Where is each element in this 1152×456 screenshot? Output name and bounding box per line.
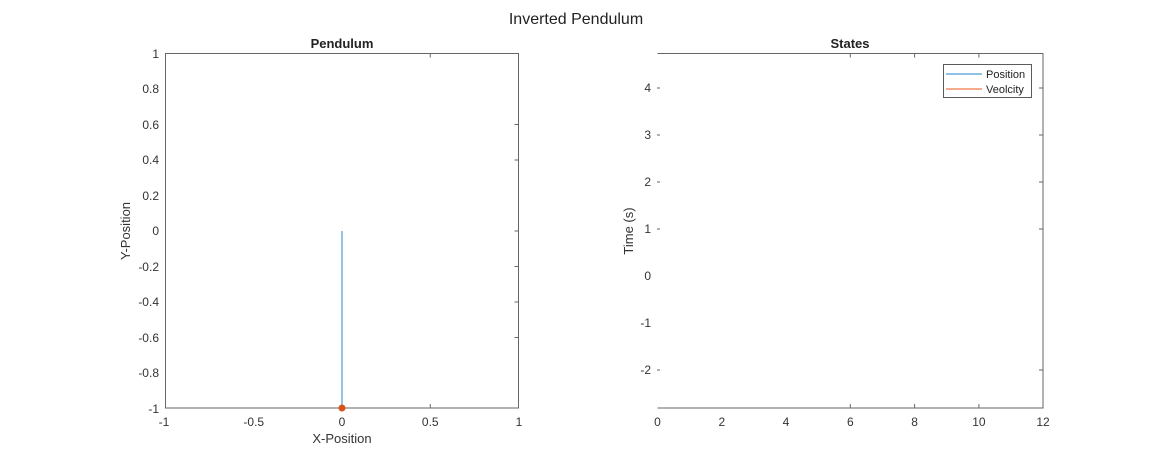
x tick labels: 4 [783,415,790,429]
pendulum rod [341,231,343,408]
x axis label: X-Position [312,431,372,446]
title: Inverted Pendulum [509,11,643,28]
x tick labels: 12 [1036,415,1050,429]
x tick labels: 8 [911,415,918,429]
x tick labels: -1 [159,415,170,429]
y tick labels: 0 [644,269,651,283]
y tick labels: 0.6 [142,118,159,132]
x tick labels [159,415,523,429]
panel: states [621,36,1050,429]
y tick labels: -1 [640,316,651,330]
y tick labels: -0.2 [138,260,159,274]
y tick labels: 1 [152,47,159,61]
y tick labels [640,81,651,377]
y tick labels: -2 [640,363,651,377]
y tick labels: 1 [644,222,651,236]
x tick labels [654,415,1050,429]
heading: pendulum: Pendulum [311,36,373,51]
y axis label: Y-Position [118,202,133,260]
x tick labels: 0 [654,415,661,429]
x tick labels: 2 [718,415,725,429]
y axis label: Time (s) [621,207,636,255]
heading: states: States [830,36,870,51]
x tick labels: -0.5 [243,415,264,429]
x tick labels: 1 [516,415,523,429]
legend [944,64,1032,98]
x tick labels: 10 [972,415,986,429]
x tick labels: 0 [339,415,346,429]
y tick labels: -0.8 [138,366,159,380]
y tick labels: 4 [644,81,651,95]
legend: Position [986,69,1025,81]
x tick labels: 0.5 [422,415,439,429]
legend: Veolcity [986,84,1024,96]
y tick labels: -1 [148,402,159,416]
y tick labels: 0.8 [142,82,159,96]
y tick labels: 3 [644,128,651,142]
y tick labels: 2 [644,175,651,189]
pendulum mass [338,404,346,412]
y tick labels: 0.2 [142,189,159,203]
y tick labels: -0.6 [138,331,159,345]
y tick labels [138,47,159,416]
panel: pendulum [118,36,523,446]
y tick labels: 0 [152,224,159,238]
x tick labels: 6 [847,415,854,429]
y tick labels: -0.4 [138,295,159,309]
y tick labels: 0.4 [142,153,159,167]
